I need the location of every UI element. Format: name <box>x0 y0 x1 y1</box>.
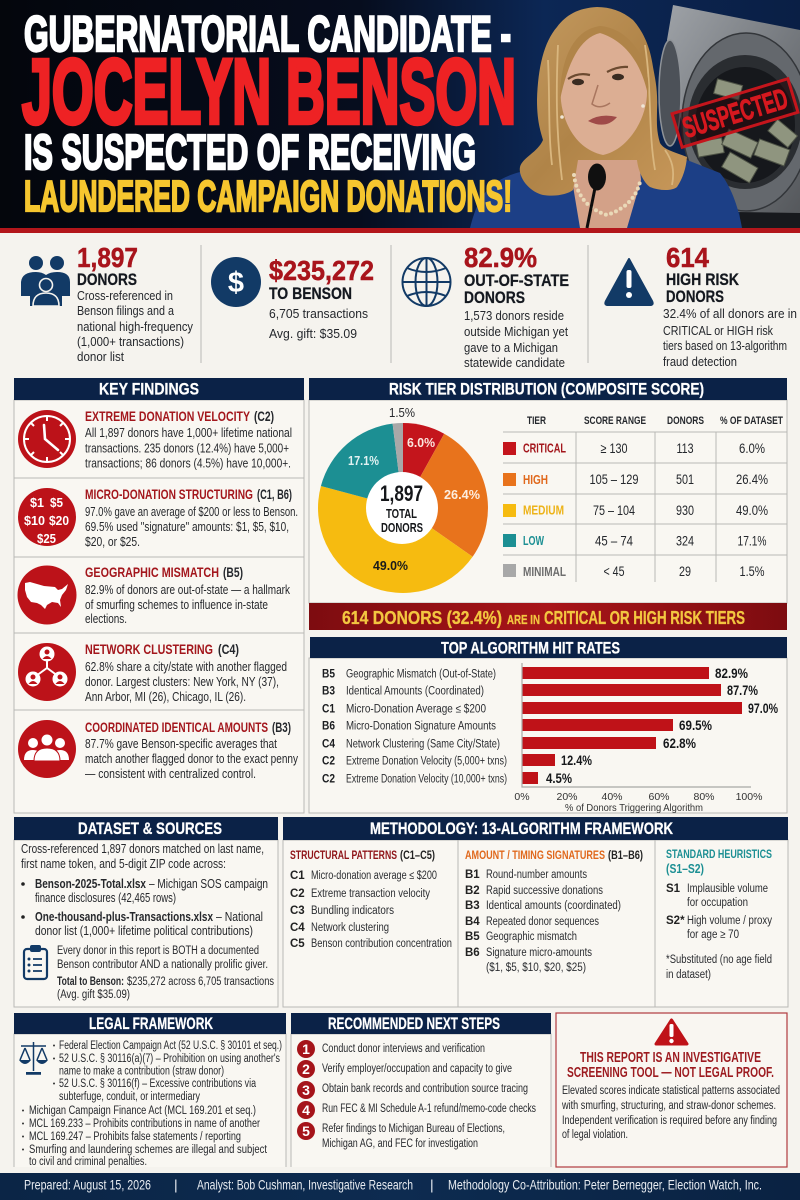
panel: dataset and sources: (Avg. gift $35.09) <box>57 989 130 1001</box>
title: GUBERNATORIAL CANDIDATE - <box>24 6 511 62</box>
panel: key findings: KEY FINDINGS <box>99 380 199 398</box>
column: amount and timing signatures: Geographic mismatch <box>486 931 577 943</box>
icon: signature amounts: $1 <box>30 496 44 510</box>
stat: dollars: $235,272 <box>269 255 374 286</box>
tier table: 113 <box>676 441 694 456</box>
bar chart: 80% <box>693 791 715 803</box>
panel: dataset and sources: Benson-2025-Total.xlsx <box>35 877 146 891</box>
finding: extreme donation velocity: (C2) <box>254 409 274 424</box>
bar chart: 87.7% <box>727 683 758 698</box>
bar chart: 82.9% <box>715 666 748 681</box>
finding: network clustering: (C4) <box>218 642 239 657</box>
finding: micro-donation structuring: 97.0% gave an average of $200 or less to Benson. <box>85 505 298 519</box>
panel: legal framework <box>14 1013 286 1168</box>
finding: micro-donation structuring: (C1, B6) <box>257 487 292 502</box>
panel: recommended next steps: Refer findings to Michigan Bureau of Elections, <box>322 1123 505 1135</box>
column: standard heuristics: *Substituted (no age field <box>666 954 772 966</box>
stat: dollars: TO BENSON <box>269 284 352 303</box>
stat: out of state: outside Michigan yet <box>464 324 568 339</box>
panel: dataset and sources <box>14 817 278 1007</box>
column: amount and timing signatures: B6 <box>465 947 480 959</box>
bar chart: Extreme Donation Velocity (5,000+ txns) <box>346 756 507 768</box>
column: amount and timing signatures: B1 <box>465 869 480 881</box>
stat: high risk <box>605 242 797 369</box>
finding: coordinated identical amounts <box>18 719 299 781</box>
donut chart: 1.5% <box>389 405 415 420</box>
tier table: 49.0% <box>736 503 768 518</box>
stat: donors: Benson filings and a <box>77 303 175 318</box>
finding: geographic mismatch <box>18 564 291 626</box>
tier table: CRITICAL <box>523 440 566 456</box>
column: structural patterns: C4 <box>290 922 305 934</box>
panel: legal framework: subterfuge, conduit, or intermediary <box>59 1091 200 1103</box>
column: amount and timing signatures: B5 <box>465 931 480 943</box>
stat: high risk: HIGH RISK <box>666 270 740 289</box>
column: amount and timing signatures: Identical amounts (coordinated) <box>486 900 621 912</box>
column: structural patterns: C3 <box>290 905 305 917</box>
stat: donors: 1,897 <box>77 242 138 273</box>
donut chart: 1,897 <box>380 481 423 506</box>
panel: legal framework: MCL 169.233 – Prohibits contributions in name of another <box>29 1118 260 1130</box>
bar chart: 4.5% <box>546 771 572 786</box>
finding: network clustering: 62.8% share a city/state with another flagged <box>85 660 287 674</box>
column: structural patterns: C2 <box>290 888 305 900</box>
bar chart: 97.0% <box>748 701 778 716</box>
tier table: LOW <box>523 533 545 548</box>
panel: recommended next steps: Verify employer/occupation and capacity to give <box>322 1063 512 1075</box>
panel: legal framework: 52 U.S.C. § 30116(a)(7) – Prohibition on using another's <box>59 1053 280 1065</box>
tier table: 930 <box>676 503 694 518</box>
tier table: 75 – 104 <box>593 503 635 518</box>
column: amount and timing signatures: Rapid successive donations <box>486 885 603 897</box>
finding: coordinated identical amounts: — consistent with centralized control. <box>85 767 256 781</box>
finding: geographic mismatch: (B5) <box>223 565 243 580</box>
icon: signature amounts: $5 <box>50 496 63 510</box>
panel: dataset and sources: finance disclosures (42,465 rows) <box>35 891 176 905</box>
tier table <box>503 415 787 582</box>
stat: high risk: 614 <box>666 242 709 273</box>
stat: high risk: DONORS <box>666 287 724 306</box>
title <box>22 6 516 221</box>
icon: signature amounts: $10 <box>24 514 45 528</box>
panel: key findings <box>14 378 304 813</box>
tier table: DONORS <box>667 415 704 427</box>
bar chart: 20% <box>556 791 578 803</box>
panel: dataset and sources: Cross-referenced 1,897 donors matched on last name, <box>21 842 264 856</box>
stat: high risk: CRITICAL or HIGH risk <box>663 323 773 338</box>
icon: group of people <box>18 720 76 778</box>
column: amount and timing signatures <box>465 848 643 974</box>
column: standard heuristics: in dataset) <box>666 969 711 981</box>
stat: donors: national high-frequency <box>77 319 193 334</box>
panel: legal framework: 52 U.S.C. § 30116(f) – Excessive contributions via <box>59 1078 256 1090</box>
tier table: MINIMAL <box>523 564 566 579</box>
bar chart: Identical Amounts (Coordinated) <box>346 686 484 698</box>
finding: network clustering: donor. Largest clusters: New York, NY (37), <box>85 675 279 689</box>
bar chart: Micro-Donation Signature Amounts <box>346 720 496 732</box>
stat: out of state: gave to a Michigan <box>464 340 558 355</box>
finding: extreme donation velocity: transactions; 86 donors (4.5%) have 10,000+. <box>85 456 291 470</box>
finding: micro-donation structuring: MICRO-DONATION STRUCTURING <box>85 486 253 502</box>
stat: dollars: Avg. gift: $35.09 <box>269 326 357 341</box>
tier table: < 45 <box>604 564 624 579</box>
panel: risk tier distribution <box>309 378 787 630</box>
icon: network <box>18 643 76 701</box>
stat: donors <box>21 242 193 364</box>
panel: dataset and sources: $235,272 across 6,705 transactions <box>127 976 274 988</box>
panel: dataset and sources: One-thousand-plus-Transactions.xlsx <box>35 910 213 924</box>
column: structural patterns: (C1–C5) <box>400 850 435 862</box>
column: structural patterns: C1 <box>290 870 305 882</box>
stat: donors: DONORS <box>77 270 137 289</box>
tier table: ≥ 130 <box>600 441 628 456</box>
bar chart: Network Clustering (Same City/State) <box>346 738 500 750</box>
panel: recommended next steps: 1 <box>302 1041 310 1057</box>
stat: dollars: 6,705 transactions <box>269 306 368 321</box>
icon: signature amounts: $20 <box>49 514 69 528</box>
panel: legal framework: Smurfing and laundering schemes are illegal and subject <box>29 1144 268 1156</box>
column: structural patterns: Micro-donation average ≤ $200 <box>311 870 437 882</box>
tier table: 29 <box>679 564 691 579</box>
panel: top algorithm hit rates: TOP ALGORITHM HIT RATES <box>441 638 620 658</box>
stat: out of state: OUT-OF-STATE <box>464 271 569 290</box>
icon: warning triangle <box>605 259 653 305</box>
tier table: 1.5% <box>740 564 764 579</box>
header banner <box>0 0 800 233</box>
finding: network clustering <box>18 641 287 704</box>
illustration: candidate portrait <box>470 7 742 228</box>
column: structural patterns: Network clustering <box>311 922 389 934</box>
donut chart: 17.1% <box>348 453 379 468</box>
icon: us map <box>18 566 76 624</box>
column: amount and timing signatures: Round-number amounts <box>486 869 587 881</box>
panel: legal framework: Michigan Campaign Finance Act (MCL 169.201 et seq.) <box>29 1105 256 1117</box>
column: structural patterns: Bundling indicators <box>311 905 394 917</box>
column: structural patterns: Benson contribution concentration <box>311 938 452 950</box>
panel: legal framework: LEGAL FRAMEWORK <box>89 1014 213 1033</box>
panel: dataset and sources: first name token, and 5-digit ZIP code across: <box>21 857 226 871</box>
panel: recommended next steps: Run FEC & MI Schedule A-1 refund/memo-code checks <box>322 1103 536 1115</box>
finding: coordinated identical amounts: (B3) <box>272 720 291 735</box>
stat: donors: donor list <box>77 349 124 364</box>
bar chart: C1 <box>322 702 335 716</box>
panel: dataset and sources: DATASET & SOURCES <box>78 819 222 838</box>
panel: recommended next steps: 3 <box>302 1082 310 1098</box>
callout: high risk summary bar: ARE IN <box>507 612 540 627</box>
column: standard heuristics <box>666 847 772 981</box>
panel: dataset and sources: Benson contributor AND a nationally prolific giver. <box>57 959 268 971</box>
panel: top algorithm hit rates <box>309 637 787 814</box>
icon: signature amounts <box>18 488 76 546</box>
column: amount and timing signatures: B3 <box>465 900 480 912</box>
finding: network clustering: NETWORK CLUSTERING <box>85 641 213 657</box>
panel: recommended next steps: Conduct donor interviews and verification <box>322 1043 485 1055</box>
stat: out of state: DONORS <box>464 288 525 307</box>
panel: dataset and sources: Total to Benson: <box>57 976 124 988</box>
panel: dataset and sources: – Michigan SOS campaign <box>149 877 268 891</box>
donut chart: 49.0% <box>373 558 408 573</box>
tier table: 324 <box>676 534 694 548</box>
panel: recommended next steps <box>291 1013 551 1167</box>
column: structural patterns: C5 <box>290 938 305 950</box>
finding: extreme donation velocity: All 1,897 donors have 1,000+ lifetime national <box>85 426 292 440</box>
column: standard heuristics: High volume / proxy <box>687 915 772 927</box>
stat: out of state <box>402 242 569 370</box>
tier table: TIER <box>527 415 546 427</box>
tier table: 501 <box>676 472 694 487</box>
panel: dataset and sources: donor list (1,000+ lifetime political contributions) <box>35 924 253 938</box>
callout: high risk summary bar: 614 DONORS (32.4%) <box>342 608 502 628</box>
bar chart: Micro-Donation Average ≤ $200 <box>346 704 486 716</box>
stat: high risk: fraud detection <box>663 354 737 369</box>
bar chart: Geographic Mismatch (Out-of-State) <box>346 668 496 680</box>
bar chart: % of Donors Triggering Algorithm <box>565 802 703 814</box>
icon: clipboard <box>24 945 47 979</box>
stat row <box>21 242 797 370</box>
stat: out of state: statewide candidate <box>464 355 565 370</box>
panel: methodology: METHODOLOGY: 13-ALGORITHM FRAMEWORK <box>370 819 674 838</box>
callout: high risk summary bar <box>309 603 787 630</box>
column: standard heuristics: for occupation <box>687 897 748 909</box>
column: structural patterns: STRUCTURAL PATTERNS <box>290 848 397 862</box>
column: standard heuristics: for age ≥ 70 <box>687 929 739 941</box>
panel: methodology <box>283 817 788 1007</box>
finding: extreme donation velocity: transactions. 235 donors (12.4%) have 5,000+ <box>85 442 289 456</box>
footer: Analyst: Bob Cushman, Investigative Research <box>197 1176 413 1192</box>
tier table: 105 – 129 <box>590 472 638 487</box>
column: amount and timing signatures: ($1, $5, $10, $20, $25) <box>486 962 586 974</box>
tier table: 26.4% <box>736 472 768 487</box>
stat: donors: Cross-referenced in <box>77 288 173 303</box>
panel: recommended next steps: 5 <box>302 1123 310 1139</box>
finding: extreme donation velocity <box>18 408 292 470</box>
tier table: % OF DATASET <box>720 415 783 427</box>
panel: dataset and sources: Every donor in this report is BOTH a documented <box>57 945 259 957</box>
column: amount and timing signatures: AMOUNT / TIMING SIGNATURES <box>465 848 605 862</box>
bar chart: 12.4% <box>561 753 592 768</box>
bar chart: B6 <box>322 718 335 732</box>
tier table: 45 – 74 <box>595 534 633 548</box>
finding: network clustering: Ann Arbor, MI (26), Chicago, IL (26). <box>85 690 246 704</box>
icon: dollar: $ <box>228 267 244 299</box>
illustration: washing machine full of cash <box>659 5 800 213</box>
column: structural patterns: Extreme transaction velocity <box>311 888 430 900</box>
icon: scales of justice <box>19 1042 48 1074</box>
finding: extreme donation velocity: EXTREME DONATION VELOCITY <box>85 408 250 424</box>
footer <box>0 1173 800 1200</box>
finding: coordinated identical amounts: match another flagged donor to the exact penny <box>85 752 299 766</box>
finding: coordinated identical amounts: 87.7% gave Benson-specific averages that <box>85 737 277 751</box>
column: standard heuristics: Implausible volume <box>687 883 768 895</box>
finding: geographic mismatch: of smurfing schemes to influence in-state <box>85 598 268 612</box>
column: amount and timing signatures: (B1–B6) <box>608 850 643 862</box>
bar chart: C2 <box>322 754 335 768</box>
finding: geographic mismatch: elections. <box>85 612 127 626</box>
panel: recommended next steps: 4 <box>302 1102 310 1118</box>
callout: disclaimer <box>556 1013 787 1167</box>
panel: legal framework: Federal Election Campaign Act (52 U.S.C. § 30101 et seq.) <box>59 1040 282 1052</box>
column: standard heuristics: S1 <box>666 883 681 895</box>
bar chart: C2 <box>322 772 335 786</box>
panel: recommended next steps: Michigan AG, and FEC for investigation <box>322 1138 478 1150</box>
tier table: SCORE RANGE <box>584 415 646 427</box>
donut chart: DONORS <box>381 520 423 535</box>
stat: dollars <box>211 255 374 341</box>
donut chart: TOTAL <box>386 506 417 521</box>
finding: coordinated identical amounts: COORDINATED IDENTICAL AMOUNTS <box>85 719 268 735</box>
icon: clock <box>18 410 76 468</box>
bar chart: 40% <box>601 791 623 803</box>
bar chart: C4 <box>322 736 335 750</box>
column: standard heuristics: S2* <box>666 915 685 927</box>
panel: recommended next steps: 2 <box>302 1061 310 1077</box>
finding: micro-donation structuring: 69.5% used "signature" amounts: $1, $5, $10, <box>85 520 289 534</box>
bar chart: B3 <box>322 684 335 698</box>
icon: signature amounts: $25 <box>37 532 56 546</box>
icon: dollar <box>211 257 261 307</box>
panel: risk tier distribution: RISK TIER DISTRIBUTION (COMPOSITE SCORE) <box>389 380 704 398</box>
panel: recommended next steps: RECOMMENDED NEXT STEPS <box>328 1014 500 1033</box>
icon: people <box>21 256 70 306</box>
bar chart: 60% <box>648 791 670 803</box>
title: IS SUSPECTED OF RECEIVING <box>24 126 476 180</box>
footer: | <box>430 1176 434 1192</box>
donut chart <box>318 405 488 593</box>
icon: warning triangle <box>656 1020 687 1044</box>
stat: out of state: 1,573 donors reside <box>464 308 564 323</box>
column: amount and timing signatures: Signature micro-amounts <box>486 947 592 959</box>
footer: Prepared: August 15, 2026 <box>24 1176 151 1192</box>
column: amount and timing signatures: Repeated donor sequences <box>486 916 599 928</box>
finding: geographic mismatch: 82.9% of donors are out-of-state — a hallmark <box>85 583 291 597</box>
column: amount and timing signatures: B4 <box>465 916 480 928</box>
finding: micro-donation structuring: $20, or $25. <box>85 535 140 549</box>
bar chart: 62.8% <box>663 736 696 751</box>
panel: recommended next steps: Obtain bank records and contribution source tracing <box>322 1083 528 1095</box>
icon: globe <box>402 258 450 306</box>
panel: dataset and sources: – National <box>216 910 263 924</box>
bar chart: 100% <box>736 791 762 803</box>
stat: out of state: 82.9% <box>464 242 537 273</box>
panel: legal framework: to civil and criminal penalties. <box>29 1156 147 1168</box>
panel: legal framework: name to make a contribution (straw donor) <box>59 1066 224 1078</box>
bar chart <box>322 663 778 814</box>
bar chart: Extreme Donation Velocity (10,000+ txns) <box>346 774 507 786</box>
bar chart: B5 <box>322 666 335 680</box>
finding: geographic mismatch: GEOGRAPHIC MISMATCH <box>85 564 219 580</box>
bar chart: 0% <box>514 791 530 803</box>
column: structural patterns <box>290 848 452 950</box>
column: standard heuristics: (S1–S2) <box>666 862 704 876</box>
donut chart: 6.0% <box>407 435 435 450</box>
tier table: 17.1% <box>738 534 766 548</box>
panel: legal framework: MCL 169.247 – Prohibits false statements / reporting <box>29 1131 241 1143</box>
finding: micro-donation structuring <box>18 486 298 549</box>
stat: donors: (1,000+ transactions) <box>77 334 184 349</box>
tier table: HIGH <box>523 472 548 487</box>
tier table: 6.0% <box>739 441 765 456</box>
donut chart: 26.4% <box>444 487 480 502</box>
callout: disclaimer: of legal violation. <box>562 1129 628 1141</box>
tier table: MEDIUM <box>523 502 564 518</box>
column: amount and timing signatures: B2 <box>465 885 480 897</box>
footer: | <box>174 1176 178 1192</box>
bar chart: 69.5% <box>679 718 712 733</box>
